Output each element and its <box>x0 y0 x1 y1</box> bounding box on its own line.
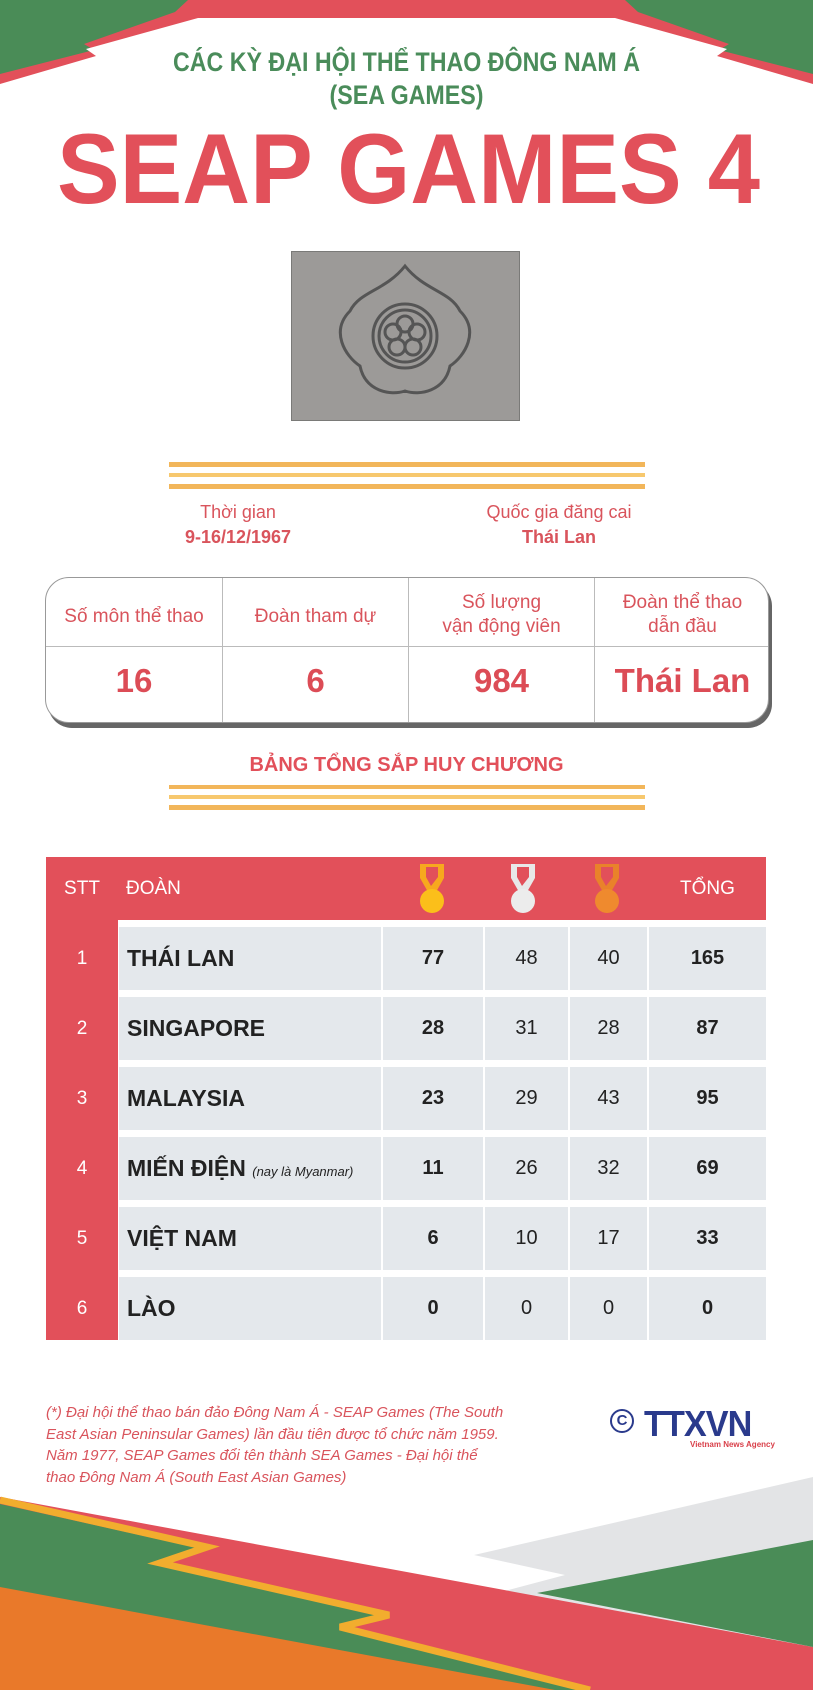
info: host: Thái Lan <box>522 527 596 547</box>
row 4: 26 <box>515 1157 538 1179</box>
row 1: 48 <box>515 947 538 969</box>
row 1: 40 <box>597 947 620 969</box>
row 1: 165 <box>691 947 724 969</box>
medal table: STT <box>64 878 100 899</box>
row 6: LÀO <box>127 1295 176 1321</box>
row 6: 0 <box>603 1297 614 1319</box>
info: host <box>486 502 632 547</box>
title: CÁC KỲ ĐẠI HỘI THỂ THAO ĐÔNG NAM Á <box>173 47 640 77</box>
stat: sports: Số môn thể thao <box>64 606 204 627</box>
row 6 <box>77 1277 766 1340</box>
row 5: 5 <box>77 1228 87 1249</box>
row 4: MIẾN ĐIỆN (nay là Myanmar) <box>127 1155 353 1181</box>
title: (SEA GAMES) <box>330 80 483 110</box>
stat: athletes: Số lượng <box>462 592 541 613</box>
footnote: thao Đông Nam Á (South East Asian Games) <box>46 1468 346 1486</box>
row 2: 28 <box>422 1017 444 1039</box>
info: time <box>185 502 291 547</box>
row 3 <box>77 1067 766 1130</box>
title <box>173 46 640 110</box>
row 4: 69 <box>696 1157 719 1179</box>
logo: TTXVN <box>610 1403 775 1449</box>
row 2: 87 <box>696 1017 719 1039</box>
row 4: 4 <box>77 1158 87 1179</box>
row 6: 6 <box>77 1298 87 1319</box>
stats box: 6 <box>306 662 325 699</box>
info: time: Thời gian <box>200 502 276 522</box>
row 4 <box>77 1137 766 1200</box>
row 6: 0 <box>427 1297 439 1319</box>
top banner <box>0 0 813 84</box>
logo image <box>291 251 520 421</box>
row 5: 17 <box>597 1227 620 1249</box>
row 1: THÁI LAN <box>127 945 234 971</box>
medal table: TỔNG <box>680 878 735 899</box>
row 3: 29 <box>515 1087 538 1109</box>
row 3: 3 <box>77 1088 87 1109</box>
stat: leader <box>623 592 742 637</box>
stat: athletes <box>442 592 561 637</box>
stat: leader: dẫn đầu <box>648 616 717 637</box>
icon: silver medal <box>511 864 535 913</box>
bottom decoration <box>0 1477 813 1690</box>
logo: TTXVN: C <box>617 1412 627 1429</box>
row 3: MALAYSIA <box>127 1085 245 1111</box>
stats box: Thái Lan <box>615 662 750 699</box>
row 1 <box>77 927 766 990</box>
stat: delegations: Đoàn tham dự <box>255 606 376 627</box>
logo: TTXVN: TTXVN <box>644 1403 751 1444</box>
stats box: 16 <box>116 662 152 699</box>
medal table <box>46 857 766 1340</box>
row 3: 95 <box>696 1087 719 1109</box>
row 2: 2 <box>77 1018 87 1039</box>
info: time: 9-16/12/1967 <box>185 527 291 547</box>
icon: gold medal <box>420 864 444 913</box>
stat: leader: Đoàn thể thao <box>623 592 742 613</box>
medal table heading: BẢNG TỔNG SẮP HUY CHƯƠNG <box>249 754 564 776</box>
footnote: (*) Đại hội thể thao bán đảo Đông Nam Á - SEAP Games (The South <box>46 1404 503 1421</box>
row 3: 23 <box>422 1087 444 1109</box>
medal table: ĐOÀN <box>126 878 181 899</box>
row 5 <box>77 1207 766 1270</box>
row 2: 28 <box>597 1017 620 1039</box>
row 6: 0 <box>702 1297 713 1319</box>
icon: bronze medal <box>595 864 619 913</box>
logo: TTXVN: Vietnam News Agency <box>690 1440 775 1449</box>
row 5: 33 <box>696 1227 719 1249</box>
row 1: 1 <box>77 948 87 969</box>
row 2: 31 <box>515 1017 538 1039</box>
footnote: East Asian Peninsular Games) lần đầu tiên được tổ chức năm 1959. <box>46 1426 499 1442</box>
footnote <box>46 1404 503 1486</box>
row 6: 0 <box>521 1297 532 1319</box>
footnote: Năm 1977, SEAP Games đổi tên thành SEA Games - Đại hội thể <box>46 1447 478 1464</box>
row 4: 11 <box>422 1157 444 1179</box>
row 5: VIỆT NAM <box>127 1225 237 1251</box>
row 4: 32 <box>597 1157 620 1179</box>
row 5: 6 <box>427 1227 439 1249</box>
row 1: 77 <box>422 947 444 969</box>
decorative lines top <box>169 462 645 489</box>
row 2 <box>77 997 766 1060</box>
stats box <box>45 577 769 723</box>
info: host: Quốc gia đăng cai <box>486 502 632 522</box>
row 2: SINGAPORE <box>127 1015 265 1041</box>
row 3: 43 <box>597 1087 620 1109</box>
stat: athletes: vận động viên <box>442 616 561 637</box>
stats box: 984 <box>474 662 529 699</box>
row 5: 10 <box>515 1227 538 1249</box>
